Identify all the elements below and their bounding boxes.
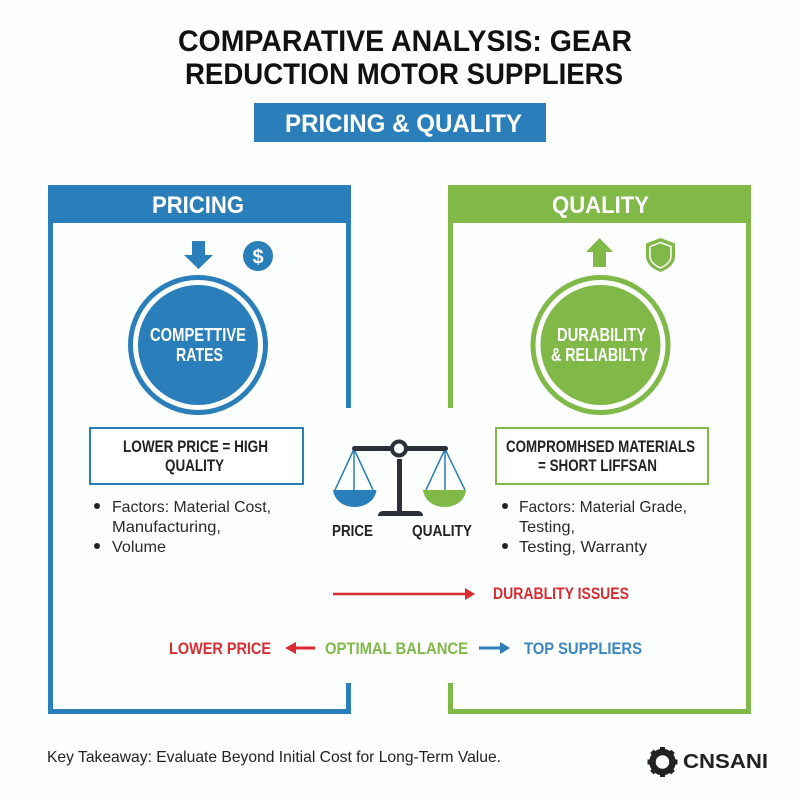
competitive rates circle: RATES bbox=[176, 345, 223, 365]
scale label: quality: QUALITY bbox=[412, 523, 473, 540]
scale label: price: PRICE bbox=[332, 523, 373, 540]
top suppliers label: TOP SUPPLIERS bbox=[524, 640, 642, 658]
title: REDUCTION MOTOR SUPPLIERS bbox=[185, 58, 623, 91]
competitive rates circle bbox=[130, 278, 266, 412]
pricing callout box bbox=[90, 428, 303, 484]
durability and reliability circle: DURABILITY bbox=[557, 325, 646, 345]
pricing callout box: QUALITY bbox=[165, 457, 224, 475]
quality factors list: Testing, Warranty bbox=[519, 539, 647, 556]
quality callout box: COMPROMHSED MATERIALS bbox=[506, 438, 695, 456]
title: COMPARATIVE ANALYSIS: GEAR bbox=[178, 25, 632, 58]
pricing factors list bbox=[94, 499, 271, 556]
quality heading: QUALITY bbox=[552, 192, 649, 219]
arrow: to top suppliers bbox=[479, 642, 510, 654]
icon: down arrow bbox=[184, 241, 213, 269]
quality factors list: Factors: Material Grade, bbox=[519, 499, 687, 516]
quality factors list bbox=[502, 499, 687, 556]
subtitle badge: PRICING & QUALITY bbox=[285, 110, 522, 138]
key takeaway: Key Takeaway: Evaluate Beyond Initial Cost for Long-Term Value. bbox=[47, 749, 501, 766]
durability and reliability circle bbox=[533, 278, 668, 412]
icon: dollar coin: $ bbox=[252, 246, 264, 268]
icon: shield bbox=[646, 238, 675, 272]
competitive rates circle: COMPETTIVE bbox=[150, 325, 246, 345]
pricing callout box: LOWER PRICE = HIGH bbox=[123, 438, 268, 456]
icon: balance scale bbox=[333, 442, 466, 516]
durability and reliability circle: & RELIABILTY bbox=[551, 345, 648, 365]
quality callout box bbox=[496, 428, 708, 484]
wordmark: CNSANI bbox=[683, 751, 768, 773]
logo bbox=[648, 747, 768, 777]
icon: up arrow bbox=[586, 238, 613, 267]
pricing factors list: Volume bbox=[112, 539, 166, 556]
icon: dollar coin bbox=[243, 241, 273, 271]
durability issues label: DURABLITY ISSUES bbox=[493, 585, 629, 603]
quality callout box: = SHORT LIFFSAN bbox=[538, 457, 657, 475]
arrow: to lower price bbox=[285, 642, 315, 654]
title bbox=[178, 25, 632, 91]
pricing factors list: Factors: Material Cost, bbox=[112, 499, 271, 516]
pricing heading: PRICING bbox=[152, 192, 244, 219]
pricing factors list: Manufacturing, bbox=[112, 519, 221, 536]
lower price label: LOWER PRICE bbox=[169, 640, 271, 658]
icon: gear bbox=[648, 747, 678, 777]
optimal balance label: OPTIMAL BALANCE bbox=[325, 640, 468, 658]
panel: quality bbox=[448, 185, 751, 714]
quality factors list: Testing, bbox=[519, 519, 575, 536]
subtitle badge bbox=[254, 103, 546, 142]
pricing panel frame bbox=[48, 185, 351, 714]
panel: pricing bbox=[48, 185, 351, 714]
quality panel frame bbox=[448, 185, 751, 714]
arrow: to durability issues bbox=[333, 588, 475, 600]
